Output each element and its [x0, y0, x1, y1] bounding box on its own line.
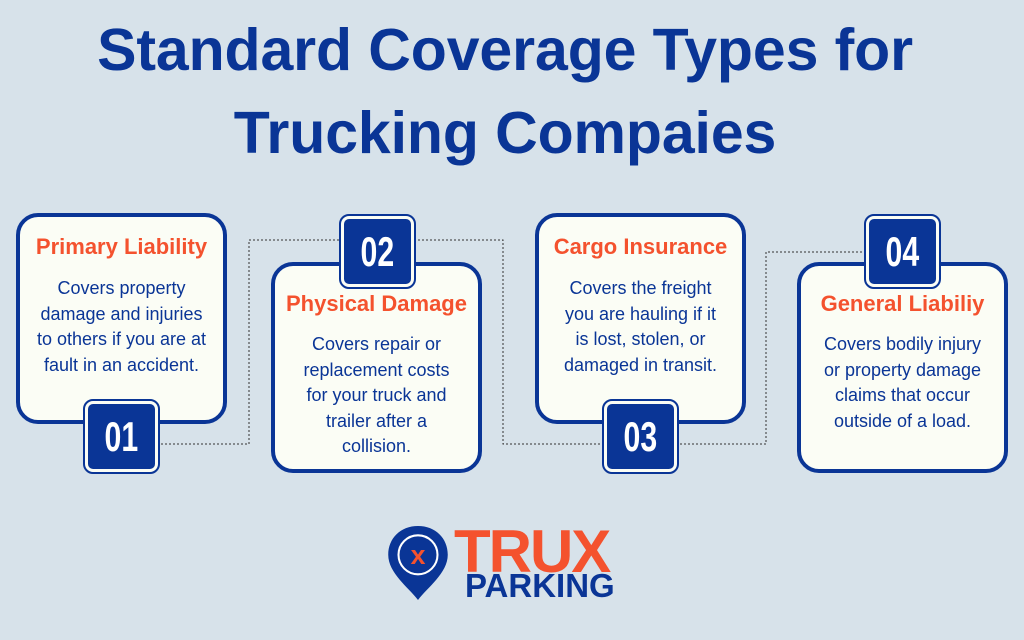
panel: cargo insurance: damaged in transit.	[564, 354, 717, 374]
panel: general liability: General Liabiliy	[821, 291, 984, 316]
panel: primary liability: Covers property	[57, 278, 186, 298]
panel: general liability: outside of a load.	[834, 410, 971, 430]
title: Trucking Compaies	[234, 100, 776, 166]
panel: cargo insurance	[535, 213, 746, 424]
panel: cargo insurance: Covers the freight	[569, 278, 712, 298]
panel: physical damage: trailer after a	[326, 410, 427, 430]
panel: general liability	[797, 262, 1008, 473]
badge 01	[85, 401, 158, 472]
panel: cargo insurance: is lost, stolen, or	[575, 329, 706, 349]
panel: primary liability: damage and injuries	[40, 304, 203, 324]
badge 02	[341, 216, 414, 287]
panel: general liability: or property damage	[824, 360, 981, 380]
panel: primary liability	[16, 213, 227, 424]
logo text: TRUX	[454, 518, 609, 585]
panel: physical damage: replacement costs	[303, 360, 450, 380]
panel: primary liability: Primary Liability	[36, 234, 207, 259]
icon: map pin: x	[411, 540, 426, 570]
panel: primary liability: to others if you are at	[37, 329, 206, 349]
badge 04: 04	[886, 228, 919, 275]
panel: general liability: claims that occur	[835, 385, 970, 405]
panel: physical damage: for your truck and	[306, 385, 447, 405]
title	[97, 17, 913, 166]
logo: PARKING	[465, 567, 615, 604]
panel: cargo insurance: Cargo Insurance	[554, 234, 727, 259]
logo	[388, 518, 615, 604]
panel: physical damage: Covers repair or	[312, 334, 441, 354]
badge 02: 02	[361, 228, 394, 275]
badge 04	[866, 216, 939, 287]
panel: cargo insurance: you are hauling if it	[565, 304, 716, 324]
panel: physical damage: collision.	[342, 436, 411, 456]
badge 03	[604, 401, 677, 472]
badge 01: 01	[105, 413, 138, 460]
badge 03: 03	[624, 413, 657, 460]
title: Standard Coverage Types for	[97, 17, 913, 83]
icon: map pin	[388, 526, 448, 600]
panel: physical damage: Physical Damage	[286, 291, 467, 316]
panel: physical damage	[271, 262, 482, 473]
panel: primary liability: fault in an accident.	[44, 354, 199, 374]
panel: general liability: Covers bodily injury	[824, 334, 981, 354]
